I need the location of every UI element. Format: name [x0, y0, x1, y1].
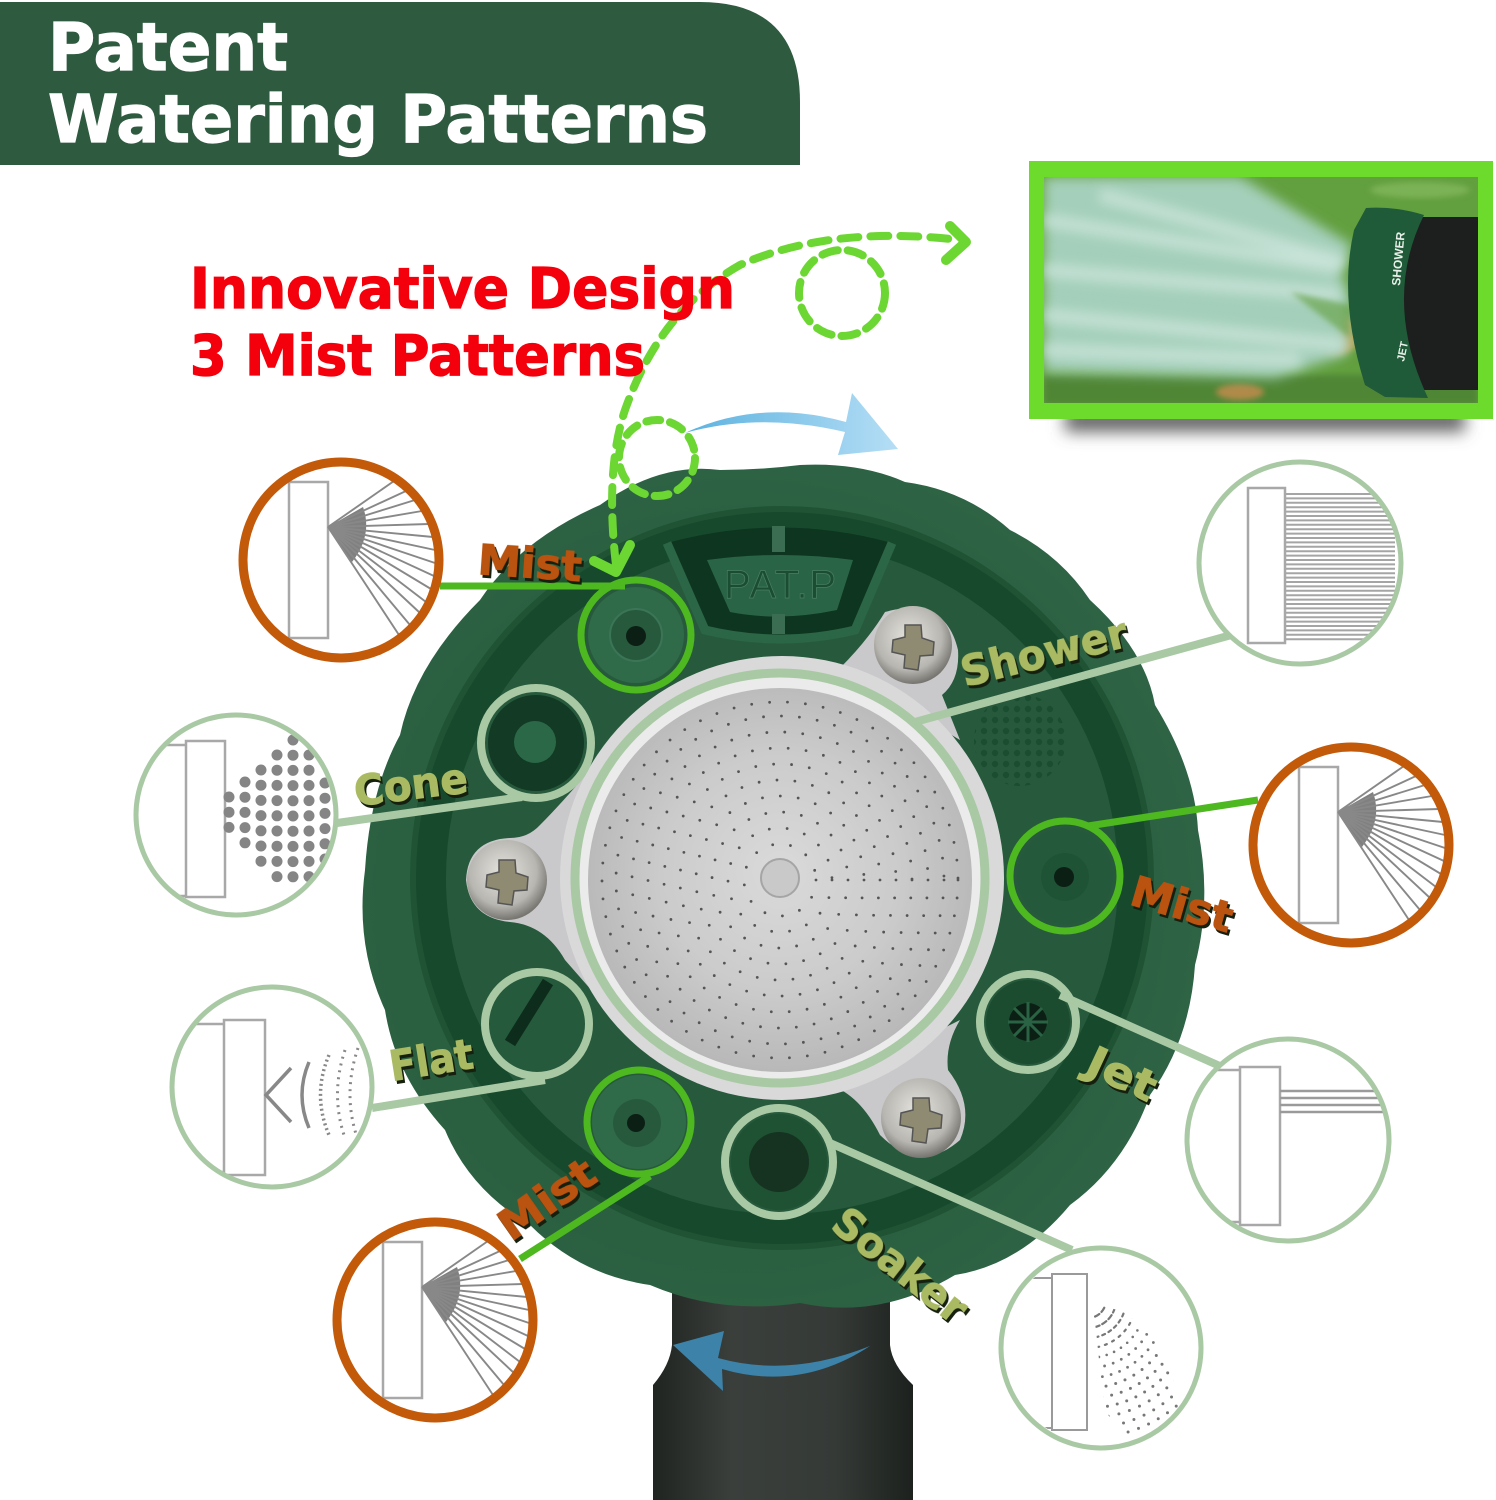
big centre ring [575, 673, 985, 1083]
screw: left [467, 840, 547, 920]
label: soaker: Soaker [823, 1197, 978, 1333]
outlet: flat [490, 977, 584, 1071]
outer rubber bumper [362, 465, 1204, 1308]
outlet: soaker [731, 1114, 827, 1210]
label: mist bottom: Mist [489, 1148, 605, 1250]
other pattern connectors [337, 634, 1235, 1250]
perforated dome [588, 688, 972, 1072]
title text: Patent [48, 9, 288, 86]
label: mist top: Mist [476, 535, 583, 591]
detail: soaker [998, 1246, 1204, 1450]
textured patch [974, 694, 1066, 786]
detail: mist top-left [243, 462, 439, 658]
label: mist right: Mist [1125, 867, 1239, 942]
outlet: mist top [588, 587, 684, 683]
dashed flow arrow [594, 226, 966, 572]
PAT.P notch [667, 526, 892, 641]
outlet highlight rings [481, 580, 1120, 1216]
handle [653, 1280, 913, 1500]
inner face [446, 542, 1118, 1214]
detail: mist bottom [337, 1222, 533, 1418]
arrowhead upper right [946, 226, 966, 260]
detail: flat [172, 987, 372, 1187]
detail: mist right [1253, 747, 1449, 943]
mist connectors [440, 586, 1258, 1259]
label on nozzle: shower: SHOWER [1389, 231, 1408, 286]
dashed circle upper [799, 250, 885, 336]
blue rotation arrow [673, 1331, 870, 1391]
label: jet: Jet [1076, 1035, 1165, 1111]
screw: top right [874, 606, 952, 684]
silver plate with ears [466, 608, 1004, 1156]
label: flat: Flat [386, 1029, 477, 1091]
detail: cone [136, 715, 336, 915]
outlet: cone [488, 695, 584, 791]
connector lines [337, 586, 1258, 1259]
detail: shower [1199, 462, 1401, 664]
title banner [0, 2, 800, 165]
outlet: mist right [1017, 828, 1113, 924]
label: shower: Shower [956, 608, 1133, 697]
callout: innovative design: 3 Mist Patterns [190, 324, 645, 389]
outlet: jet [986, 980, 1070, 1064]
detail: jet [1187, 1039, 1389, 1241]
screw: bottom right [881, 1078, 961, 1158]
pattern rings [481, 688, 1076, 1216]
pattern labels [351, 535, 1239, 1333]
mist rings [581, 580, 1120, 1174]
PAT.P embossed text: PAT.P [724, 563, 836, 607]
dashed circle lower [619, 420, 695, 496]
photo shadow [1065, 408, 1465, 432]
label on nozzle: jet: JET [1395, 340, 1411, 363]
arrowhead lower [594, 545, 630, 572]
blue rotation arrow top [685, 393, 898, 455]
outlet: mist bottom [592, 1075, 686, 1169]
nozzle head [362, 465, 1204, 1308]
callout: innovative design: Innovative Design [190, 257, 735, 322]
label: cone: Cone [351, 753, 470, 816]
title text: Watering Patterns [48, 81, 708, 158]
photo: hose nozzle spraying on lawn [1029, 161, 1493, 432]
